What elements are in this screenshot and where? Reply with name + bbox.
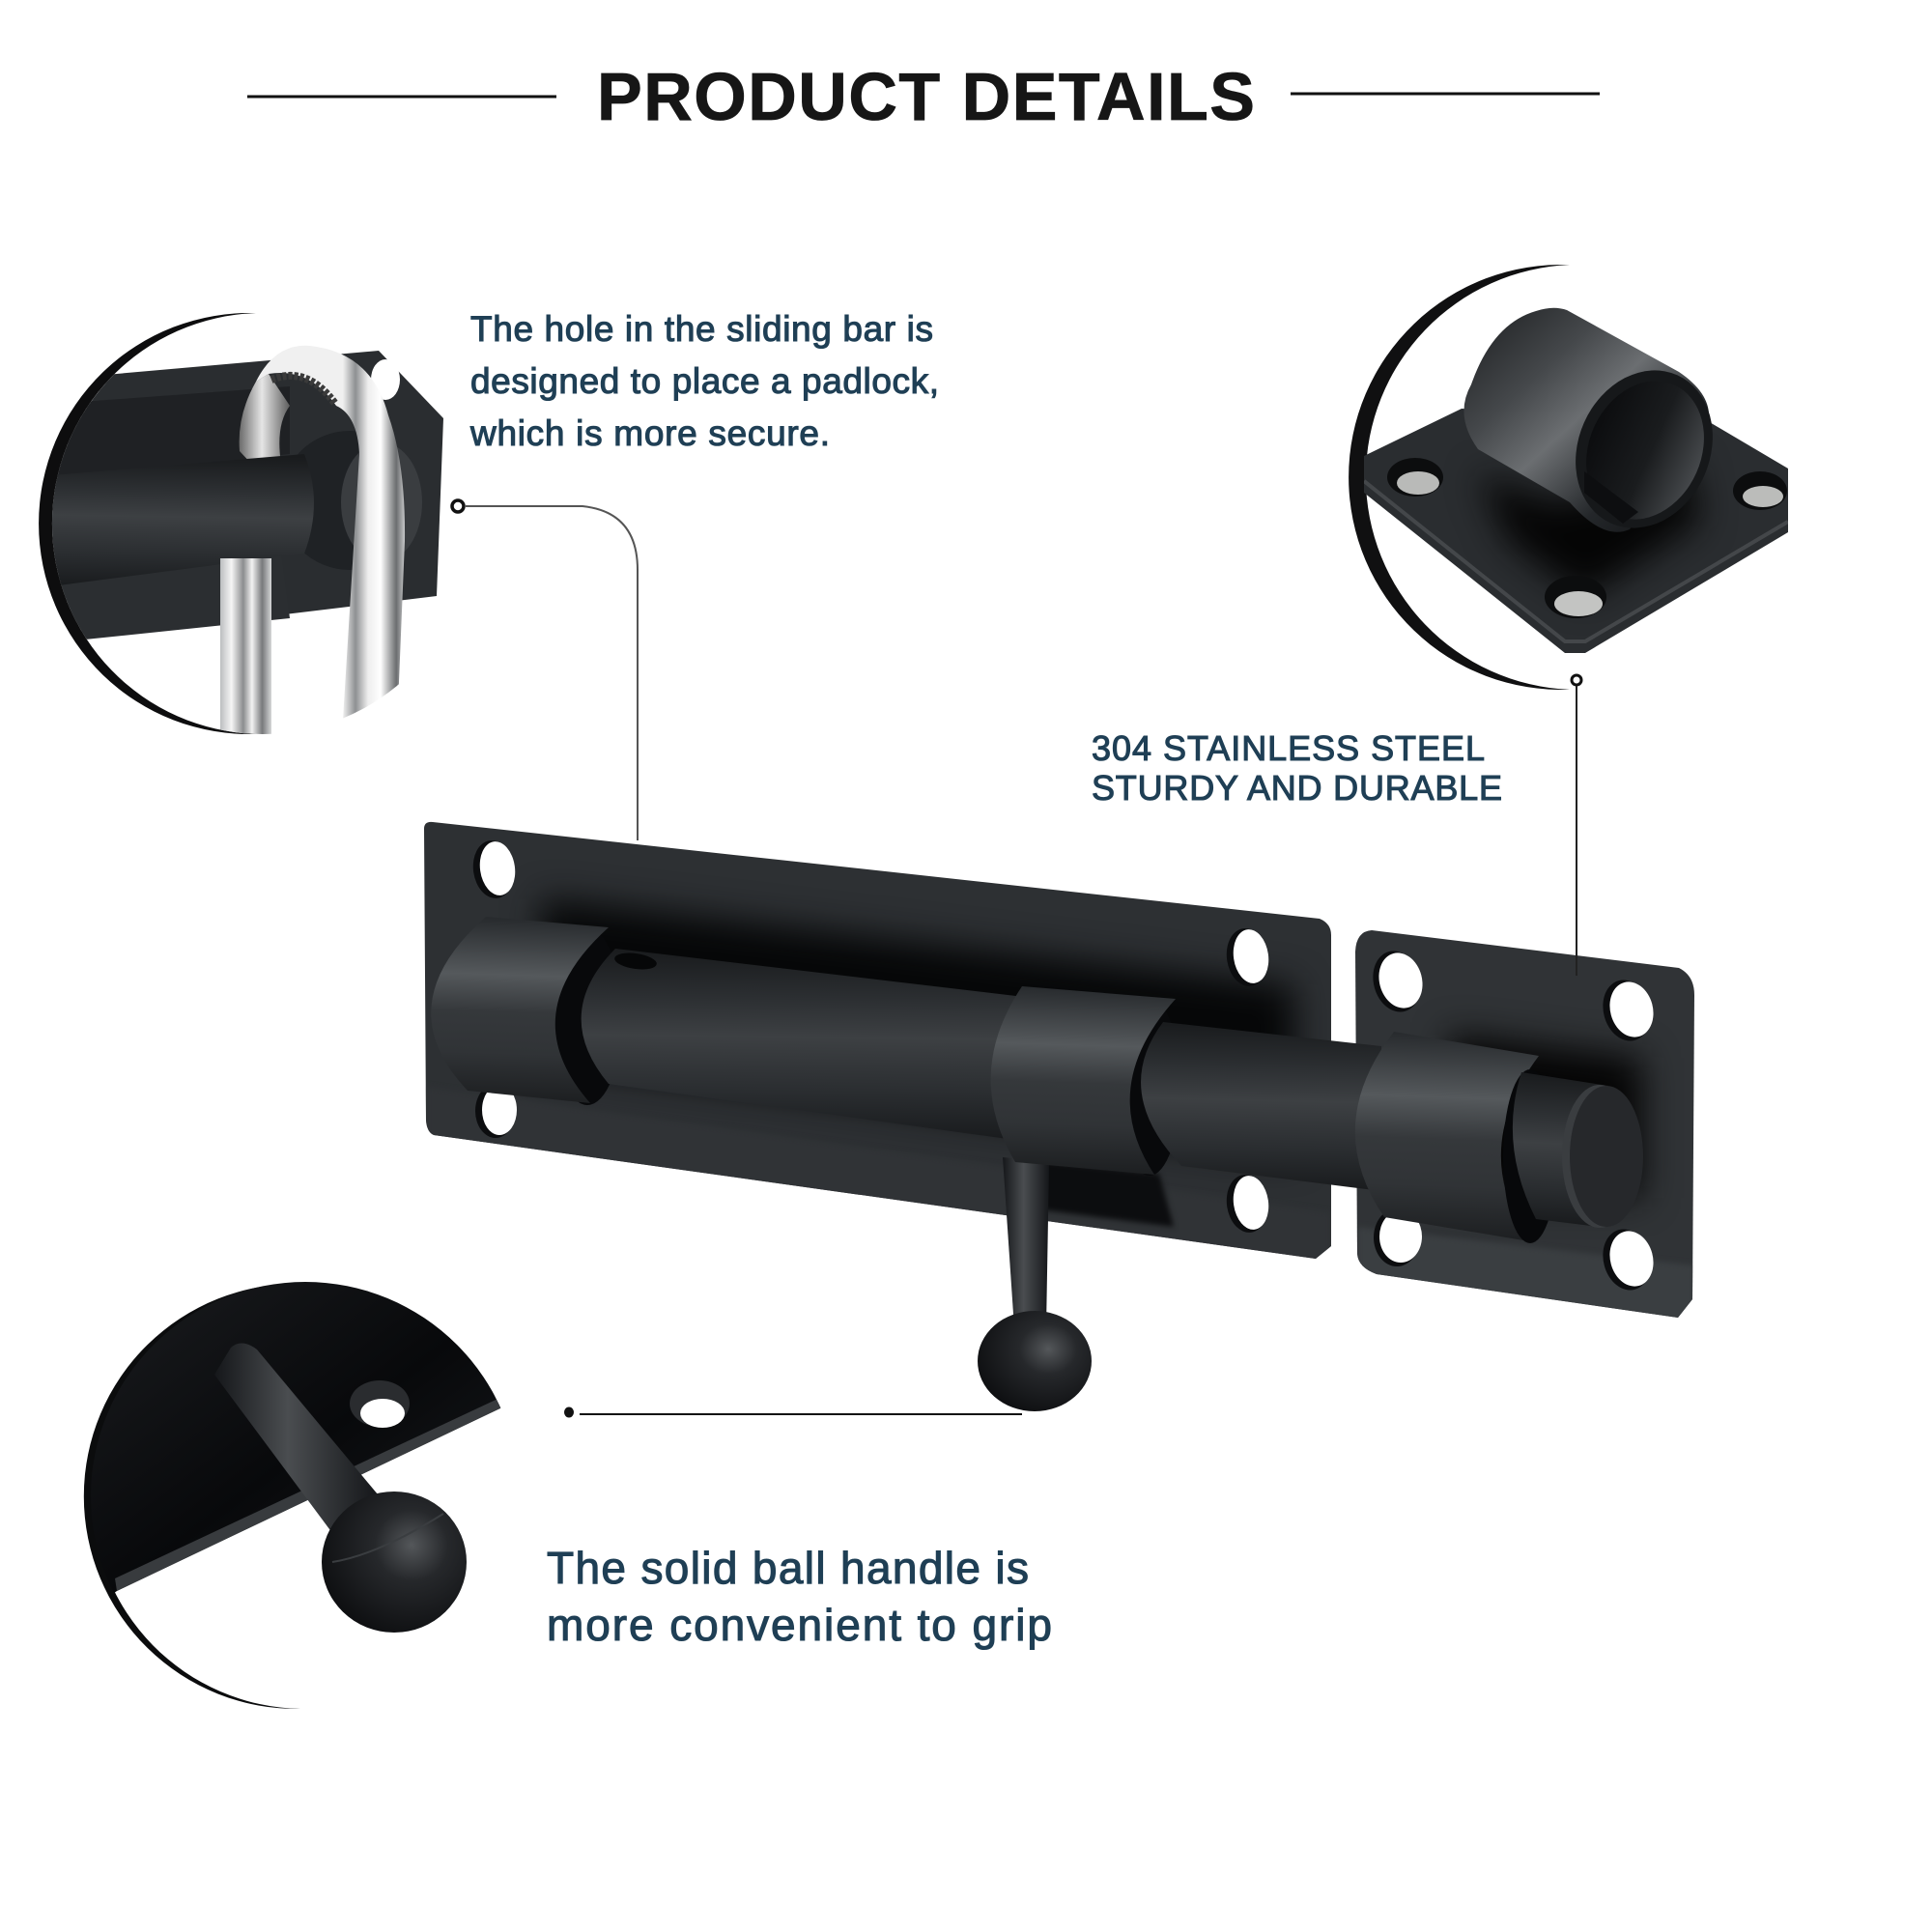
sliding rod: [553, 927, 1381, 1191]
leader line: ball handle: [564, 1406, 1022, 1418]
title heading: PRODUCT DETAILS: [597, 59, 1255, 134]
crescent frame: [1349, 265, 1570, 690]
panel: ball handle detail: [83, 1282, 500, 1709]
leader line: padlock: [452, 500, 638, 840]
plate holes: [1387, 458, 1787, 618]
plate hole: [350, 1380, 410, 1428]
title heading: [247, 59, 1600, 134]
callout text: padlock hole: The hole in the sliding bar is: [470, 309, 933, 349]
bolt plate: [424, 822, 1331, 1265]
barrel: [1463, 308, 1709, 532]
crescent frame: [39, 313, 256, 734]
angled plate: [92, 1282, 500, 1592]
crescent frame: [84, 1284, 300, 1709]
bolt end: [1503, 1069, 1643, 1243]
callout text: ball handle: The solid ball handle is: [547, 1543, 1029, 1593]
infographic canvas: [39, 71, 1788, 1709]
ball handle: [978, 1157, 1092, 1411]
callout text: stainless steel: STURDY AND DURABLE: [1092, 768, 1502, 808]
callout text: stainless steel: [1092, 728, 1502, 808]
callout text: padlock hole: designed to place a padlock,: [470, 361, 939, 401]
callout text: stainless steel: 304 STAINLESS STEEL: [1092, 728, 1485, 768]
main product: barrel bolt latch: [424, 822, 1694, 1411]
keeper holes: [1367, 946, 1427, 1017]
callout text: ball handle: [547, 1543, 1052, 1650]
keeper plate: [1355, 930, 1694, 1323]
strike plate: [1364, 409, 1788, 653]
callout text: padlock hole: which is more secure.: [469, 413, 830, 453]
leader line: strike plate: [1572, 675, 1581, 976]
plate holes: [469, 838, 518, 901]
panel: strike plate detail: [1349, 265, 1788, 690]
padlock photo: [29, 346, 443, 742]
callout text: padlock hole: [469, 309, 939, 453]
panel: padlock detail: [29, 313, 443, 742]
callout text: ball handle: more convenient to grip: [547, 1600, 1052, 1650]
bolt guides: [431, 917, 1539, 1241]
stem and ball: [214, 1343, 467, 1633]
